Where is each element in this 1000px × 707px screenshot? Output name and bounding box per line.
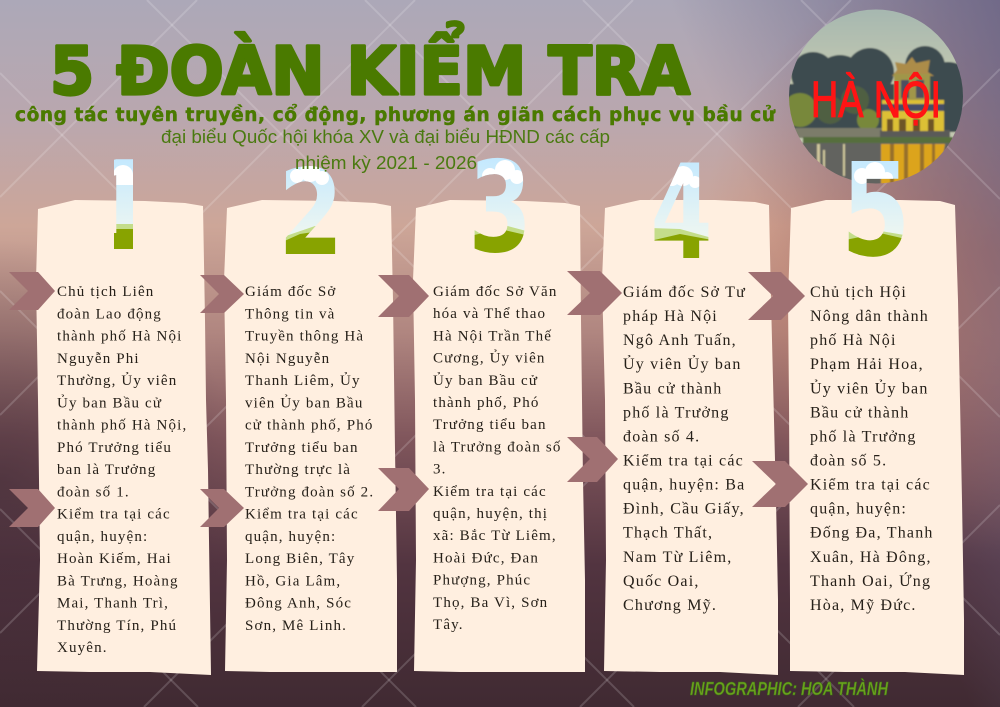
text block: team 1: Thường, Ủy viên	[57, 372, 177, 389]
text block: team 3: Trưởng tiểu ban	[433, 417, 547, 433]
number 4	[654, 162, 708, 258]
text block: team 2: Thanh Liêm, Ủy	[245, 372, 361, 389]
text block: team 3: Tây.	[433, 617, 464, 633]
Hanoi photo circle	[789, 10, 963, 184]
text block: team 5: phố Hà Nội	[810, 332, 897, 349]
text block: team 4: phố là Trưởng	[623, 404, 730, 421]
text block: team 2: Kiểm tra tại các	[245, 506, 359, 522]
text block: team 1: Kiểm tra tại các	[57, 506, 171, 522]
water	[802, 142, 950, 184]
text block: team 1: thành phố Hà Nội	[57, 328, 182, 344]
subtitle: regular lines	[161, 127, 610, 173]
text block: team 4: Ủy viên Ủy ban	[623, 354, 742, 373]
text block: team 5: Hòa, Mỹ Đức.	[810, 597, 917, 614]
text block: team 1: quận, huyện:	[57, 529, 148, 545]
text block: team 4: Đình, Cầu Giấy,	[623, 501, 745, 518]
subtitle: regular lines: đại biểu Quốc hội khóa XV và đại biểu HĐND các cấp	[161, 127, 610, 147]
text block: team 2: Trưởng tiểu ban	[245, 440, 359, 456]
text block: team 4: Kiểm tra tại các	[623, 452, 744, 469]
text block: team 4: Chương Mỹ.	[623, 597, 717, 614]
text block: team 3: xã: Bắc Từ Liêm,	[433, 528, 557, 544]
arrow 1b	[9, 489, 55, 527]
text block: team 2: viên Ủy ban Bầu	[245, 394, 363, 411]
number 2: 2	[278, 145, 343, 283]
text block: team 5: Chủ tịch Hội	[810, 284, 907, 301]
number 3	[474, 158, 524, 253]
panel: paper 4	[602, 200, 778, 675]
arrow 5b	[752, 461, 808, 507]
pagoda tower	[882, 57, 944, 131]
text block: team 4: Thạch Thất,	[623, 525, 713, 542]
text block: team 5: Nông dân thành	[810, 308, 929, 325]
number 1: 1	[87, 136, 159, 279]
text block: team 2: Nội Nguyễn	[245, 351, 330, 367]
text block: team 4: Bầu cử thành	[623, 380, 722, 397]
text block: team 3: Giám đốc Sở Văn	[433, 284, 557, 300]
text block: team 2: quận, huyện:	[245, 529, 336, 545]
text block: team 5: Bầu cử thành	[810, 404, 910, 421]
text block: team 3: hóa và Thể thao	[433, 306, 546, 322]
panel: paper 1	[36, 200, 211, 675]
arrow 3a	[378, 275, 429, 317]
number 3: 3	[468, 134, 532, 281]
text block: team 4: Nam Từ Liêm,	[623, 549, 732, 566]
text block: team 5: Xuân, Hà Đông,	[810, 549, 932, 566]
text block: team 2: cử thành phố, Phó	[245, 418, 374, 434]
text block: team 1: Mai, Thanh Trì,	[57, 596, 169, 612]
text block: team 2: Trưởng đoàn số 2.	[245, 484, 374, 500]
text block: team 1: thành phố Hà Nội,	[57, 418, 187, 434]
text block: team 2: Đông Anh, Sóc	[245, 596, 352, 612]
arrow 5a	[748, 272, 805, 320]
number 4: 4	[650, 136, 712, 289]
text block: team 2: Truyền thông Hà	[245, 328, 364, 344]
arrow 3b	[378, 468, 429, 511]
text block: team 4: đoàn số 4.	[623, 428, 700, 445]
Hanoi label: HÀ NỘI	[811, 71, 941, 128]
text block: team 3: 3.	[433, 462, 447, 478]
text block: team 1: Nguyễn Phi	[57, 351, 140, 367]
text block: team 5: Kiểm tra tại các	[810, 477, 931, 494]
text block: team 3: quận, huyện, thị	[433, 506, 548, 522]
credit: INFOGRAPHIC: HOA THÀNH	[690, 678, 889, 699]
text block: team 1: Thường Tín, Phú	[57, 618, 177, 634]
panel: paper 2	[224, 200, 397, 672]
text block: team 4: quận, huyện: Ba	[623, 477, 745, 494]
text block: team 3: Thọ, Ba Vì, Sơn	[433, 595, 548, 611]
text block: team 4: Quốc Oai,	[623, 573, 700, 590]
number 5: 5	[841, 136, 911, 286]
text block: team 3: Kiểm tra tại các	[433, 484, 547, 500]
arrow 4a	[567, 271, 622, 315]
text block: team 5: Ủy viên Ủy ban	[810, 378, 929, 397]
text block: team 1: Phó Trưởng tiểu	[57, 440, 172, 456]
text block: team 3: Phượng, Phúc	[433, 573, 531, 589]
text block: team 5: Phạm Hải Hoa,	[810, 356, 924, 373]
text block: team 3: Hoài Đức, Đan	[433, 550, 539, 566]
title: 5 ĐOÀN KIỂM TRA	[50, 21, 690, 110]
text block: team 2: Thông tin và	[245, 306, 335, 322]
text block: team 4: Ngô Anh Tuấn,	[623, 332, 737, 349]
text block: team 3: Hà Nội Trần Thế	[433, 328, 552, 344]
shore	[785, 128, 885, 138]
text block: team 5: đoàn số 5.	[810, 452, 887, 469]
number 1	[114, 159, 133, 249]
text block: team 5: quận, huyện:	[810, 501, 907, 518]
text block: team 3: Cương, Ủy viên	[433, 350, 546, 367]
subtitle: regular lines: nhiệm kỳ 2021 - 2026	[295, 153, 477, 173]
text block: team 2: Sơn, Mê Linh.	[245, 618, 347, 634]
text block: team 5: phố là Trưởng	[810, 428, 917, 445]
text block: team 5: Thanh Oai, Ứng	[810, 571, 931, 590]
text block: team 3: là Trưởng đoàn số	[433, 439, 562, 455]
subtitle: bold line: công tác tuyên truyền, cổ động, phương án giãn cách phục vụ bầu cử	[15, 104, 776, 126]
text block: team 1: Bà Trưng, Hoàng	[57, 573, 179, 589]
text block: team 2: Giám đốc Sở	[245, 284, 336, 300]
text block: team 2: Thường trực là	[245, 462, 351, 478]
text block: team 1: Hoàn Kiếm, Hai	[57, 551, 172, 567]
text block: team 1: Chủ tịch Liên	[57, 284, 154, 300]
arrow 2b	[200, 489, 244, 527]
text block: team 2: Hồ, Gia Lâm,	[245, 573, 341, 589]
reflection of the tower	[881, 144, 945, 184]
panel: paper 5	[788, 200, 964, 675]
arrow 1a	[9, 272, 55, 310]
arrow 2a	[200, 275, 244, 313]
text block: team 4: Giám đốc Sở Tư	[623, 284, 746, 301]
text block: team 1: Xuyên.	[57, 640, 108, 656]
text block: team 4: pháp Hà Nội	[623, 308, 718, 325]
text block: team 1: đoàn Lao động	[57, 306, 162, 322]
trees	[785, 46, 974, 132]
panel: paper 3	[413, 200, 585, 672]
text block: team 2: Long Biên, Tây	[245, 551, 355, 567]
text block: team 1: ban là Trưởng	[57, 462, 156, 478]
lit foliage	[783, 93, 879, 131]
text block: team 5: Đống Đa, Thanh	[810, 525, 934, 542]
text block: team 3: thành phố, Phó	[433, 395, 540, 411]
number 2	[286, 166, 336, 254]
text block: team 3: Ủy ban Bầu cử	[433, 372, 538, 389]
number 5	[848, 161, 904, 257]
arrow 4b	[567, 437, 618, 482]
text block: team 1: Ủy ban Bầu cử	[57, 394, 162, 411]
text block: team 1: đoàn số 1.	[57, 484, 130, 500]
